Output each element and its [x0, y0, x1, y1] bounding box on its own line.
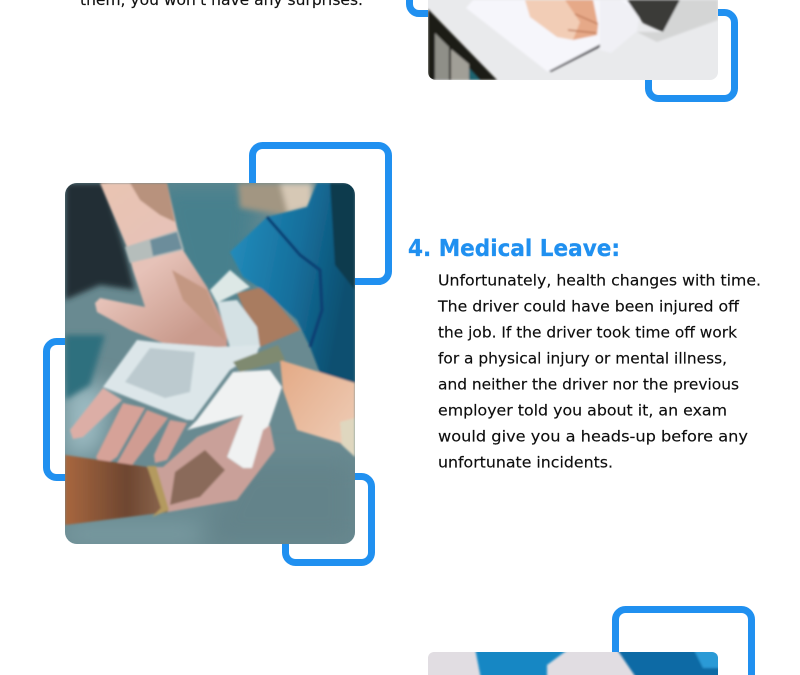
frame: point 3 photo left accent — [410, 0, 440, 14]
heading: Medical Leave: 4. Medical Leave: — [408, 234, 620, 262]
text block: Medical Leave description: and neither the driver nor the previous — [438, 376, 739, 394]
frame: point 4 top right accent — [252, 146, 388, 282]
text block: Medical Leave description: the job. If the driver took time off work — [438, 324, 737, 342]
frame: point 5 top right accent — [616, 610, 752, 675]
text block: Medical Leave description: Unfortunately, health changes with time. — [438, 272, 761, 290]
bandage — [217, 300, 260, 348]
text block: Medical Leave description: The driver could have been injured off — [437, 298, 739, 316]
forearm under bandage — [237, 287, 300, 347]
photo: hands wrapping a bandage — [65, 183, 355, 544]
text block: Medical Leave description: unfortunate incidents. — [438, 454, 613, 472]
lower forearm — [65, 455, 168, 525]
upper arm and hand — [95, 183, 227, 347]
blue cloth — [230, 183, 355, 383]
text block: Medical Leave description: employer told you about it, an exam — [438, 402, 727, 420]
frame: point 4 left accent — [46, 342, 182, 478]
metal watch band — [125, 230, 184, 263]
frame: point 4 bottom right accent — [286, 476, 372, 562]
text block: Medical Leave description — [437, 272, 761, 472]
gold bracelet — [147, 466, 169, 517]
frame: point 3 photo right accent — [648, 12, 734, 98]
lower hand — [147, 415, 275, 512]
photo: person in blue scrubs — [428, 652, 718, 675]
wrapped bandage on hand — [187, 370, 282, 468]
text block: Medical Leave description: would give you a heads-up before any — [438, 428, 748, 446]
right hand — [280, 360, 355, 457]
fingers of open hand — [70, 388, 122, 439]
photo: hand writing on notebook at desk — [428, 0, 718, 80]
text block: Medical Leave description: for a physical injury or mental illness, — [438, 350, 727, 368]
